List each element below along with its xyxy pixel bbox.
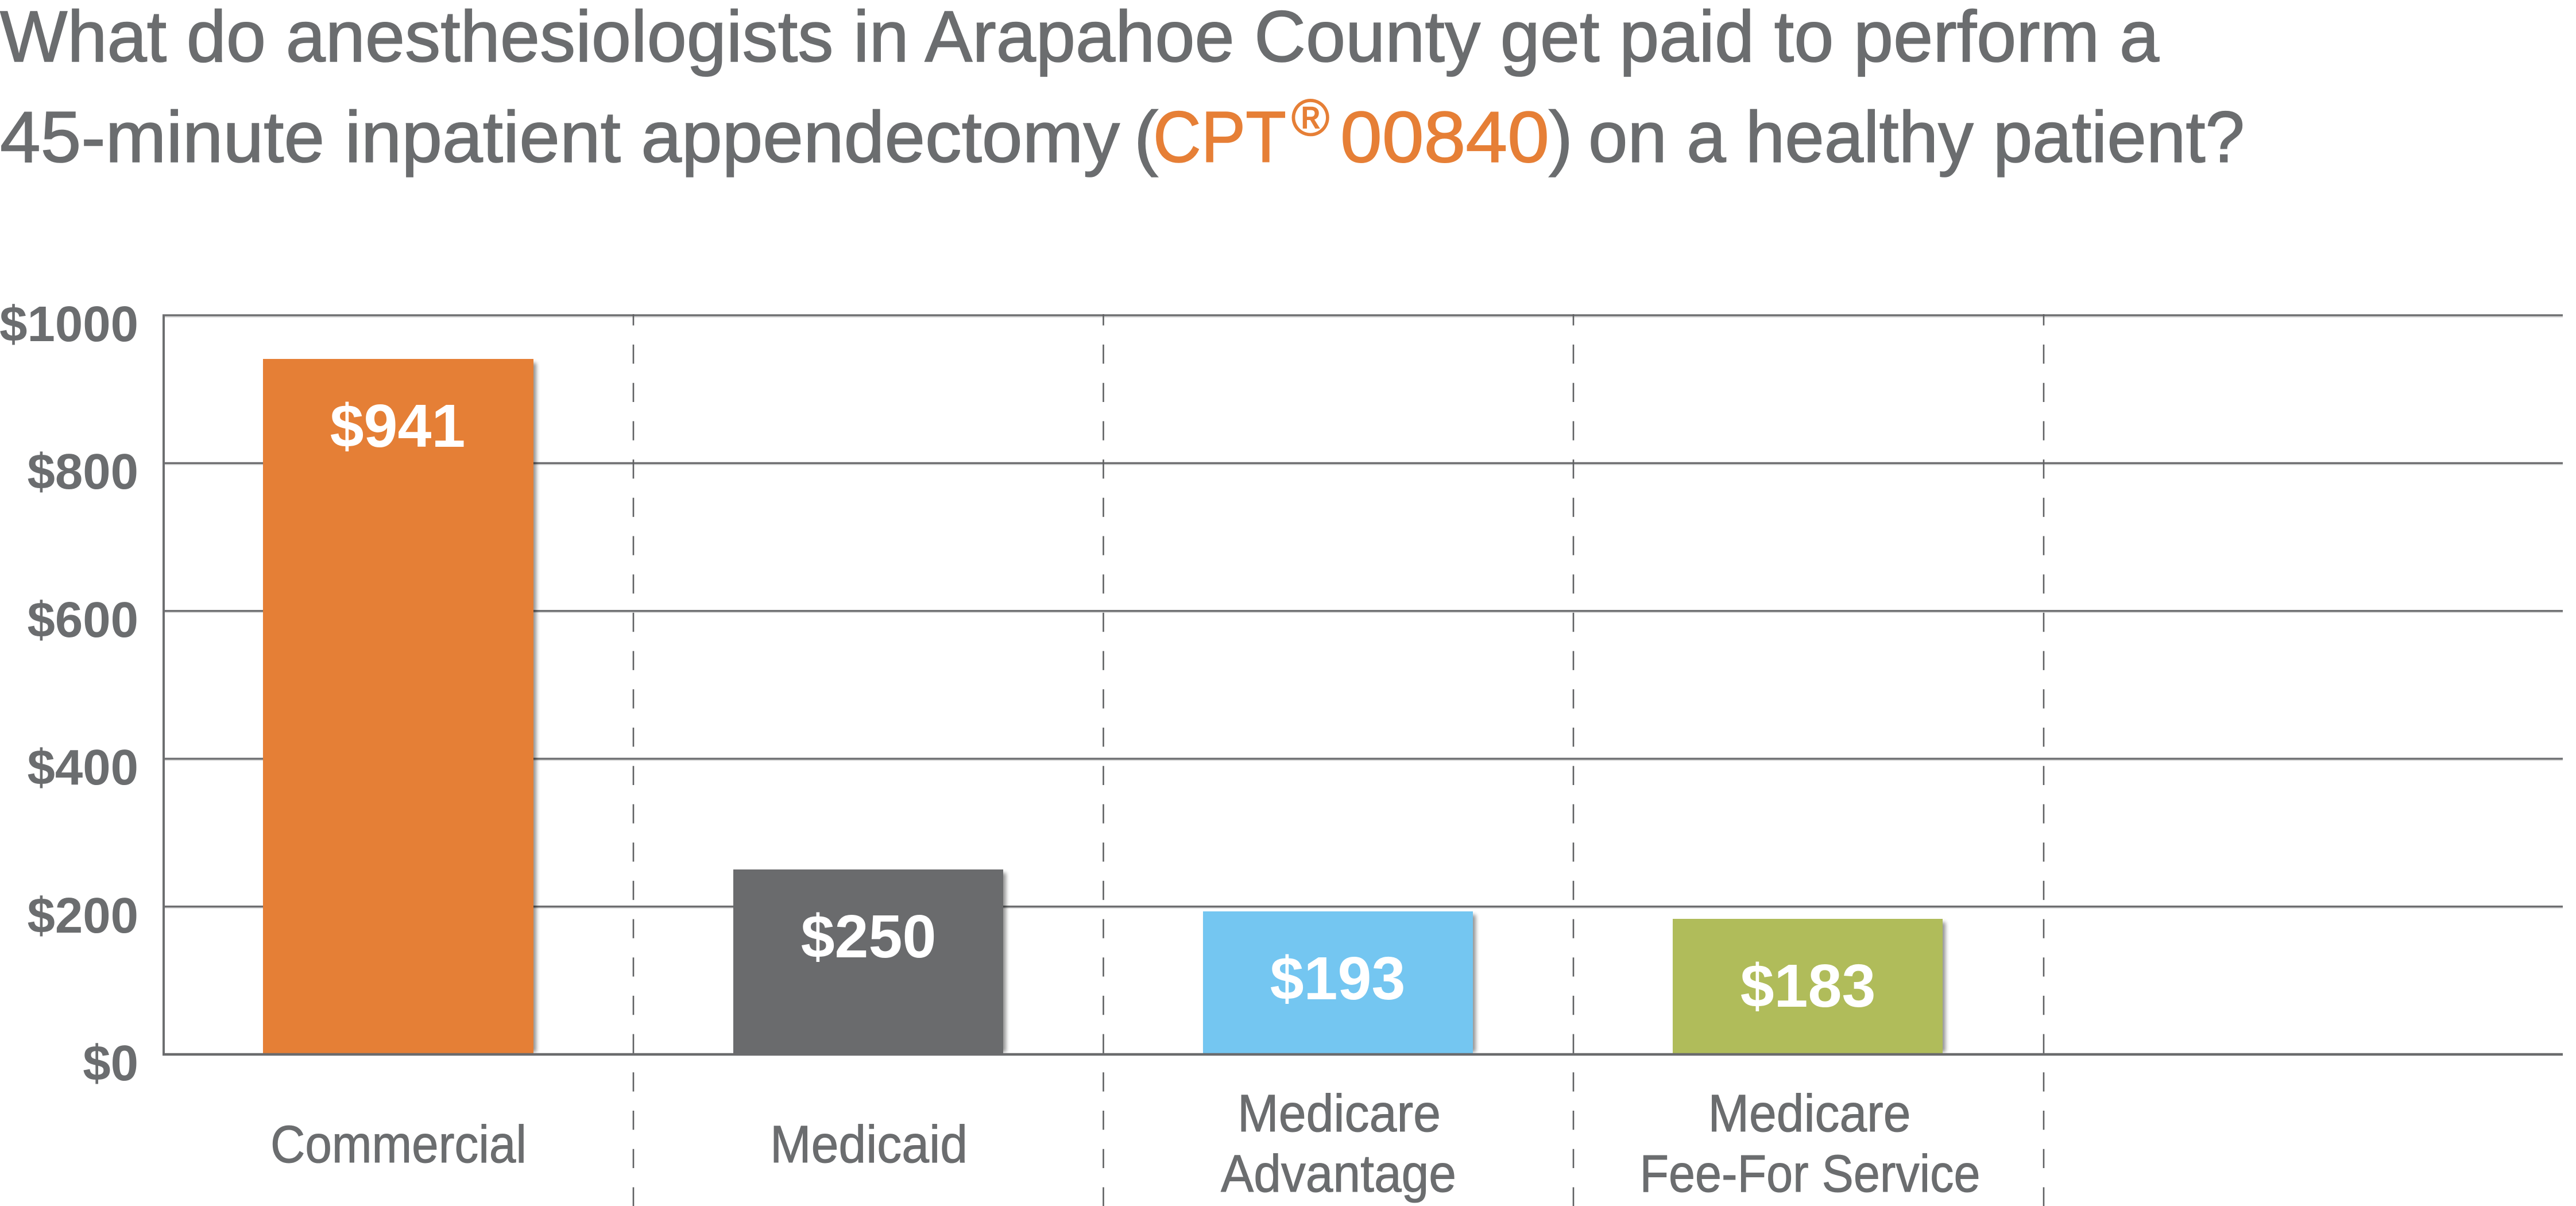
- y axis labels: $600: [27, 592, 138, 648]
- title line 2: ®: [1291, 90, 1329, 147]
- label: Medicare Advantage: Advantage: [1221, 1145, 1456, 1203]
- white mask above first divider dash: [629, 299, 2050, 314]
- label: Medicare Fee-For Service: [1640, 1084, 1980, 1203]
- bar shadows: [266, 363, 1945, 1052]
- y axis labels: [0, 296, 138, 1091]
- title line 2: 45-minute inpatient appendectomy: [0, 96, 1120, 177]
- label: Medicaid: Medicaid: [770, 1115, 968, 1174]
- x axis baseline: [163, 1053, 2563, 1056]
- bar: Medicare Fee-For Service: [1673, 919, 1943, 1054]
- title line 2: ): [1549, 96, 1573, 177]
- y axis gridlines: [163, 315, 2563, 1056]
- title line 2: CPT: [1153, 96, 1286, 177]
- chart: [0, 296, 2563, 1206]
- value: $941: $941: [330, 392, 465, 460]
- category dividers: [633, 306, 2044, 1206]
- bar: Medicare Advantage: [1203, 911, 1473, 1054]
- label: Commercial: Commercial: [270, 1115, 527, 1174]
- y axis labels: $0: [83, 1035, 138, 1091]
- y axis labels: $400: [27, 740, 138, 795]
- title: [0, 0, 2245, 177]
- value: $193: $193: [1270, 945, 1405, 1012]
- y axis labels: $800: [27, 444, 138, 500]
- label: Medicare Advantage: Medicare: [1237, 1084, 1441, 1143]
- bar: Commercial: [263, 359, 533, 1054]
- title line 2: [0, 90, 2245, 177]
- value: $183: $183: [1740, 952, 1875, 1020]
- bar: Medicaid: [733, 869, 1003, 1054]
- y axis labels: $1000: [0, 296, 138, 352]
- value: $250: $250: [801, 903, 936, 971]
- title line 2: on a healthy patient?: [1588, 96, 2245, 177]
- category labels: [270, 1084, 1980, 1203]
- label: Medicare Fee-For Service: Fee-For Service: [1640, 1145, 1980, 1203]
- title line 2: (: [1134, 96, 1158, 177]
- y axis labels: $200: [27, 888, 138, 944]
- label: Medicare Fee-For Service: Medicare: [1708, 1084, 1911, 1143]
- label: Medicare Advantage: [1221, 1084, 1456, 1203]
- title line 2: 00840: [1340, 96, 1549, 177]
